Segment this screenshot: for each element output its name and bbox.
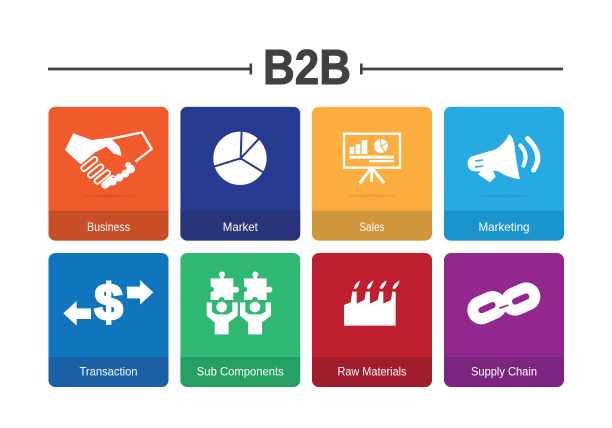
panel: business <box>48 107 168 241</box>
icon: dollar with arrows <box>63 274 153 330</box>
label: market: Market <box>223 220 258 234</box>
label: transaction: Transaction <box>80 364 138 378</box>
label: business: Business <box>87 220 130 234</box>
label: sales: Sales <box>360 220 384 234</box>
icon: factory <box>344 280 400 326</box>
panel: market <box>180 107 300 241</box>
icon: handshake <box>65 132 152 187</box>
title: B2B <box>263 41 351 95</box>
panel: marketing <box>444 107 564 241</box>
label: supply chain: Supply Chain <box>471 364 537 378</box>
label: raw materials: Raw Materials <box>338 364 406 378</box>
panel: sub components <box>180 253 300 387</box>
icon: chain link <box>470 285 538 322</box>
label: marketing: Marketing <box>478 220 530 234</box>
label: sub components: Sub Components <box>197 364 284 378</box>
icon: megaphone <box>468 134 538 182</box>
panel: raw materials <box>312 253 432 387</box>
panel: sales <box>312 107 432 241</box>
icon: pie chart <box>212 130 267 185</box>
panel: transaction <box>48 253 168 387</box>
icon: presentation board <box>344 134 400 183</box>
panel: supply chain <box>444 253 564 387</box>
icon: dollar with arrows: $ <box>94 274 123 330</box>
icon: people holding puzzle pieces <box>207 272 272 334</box>
